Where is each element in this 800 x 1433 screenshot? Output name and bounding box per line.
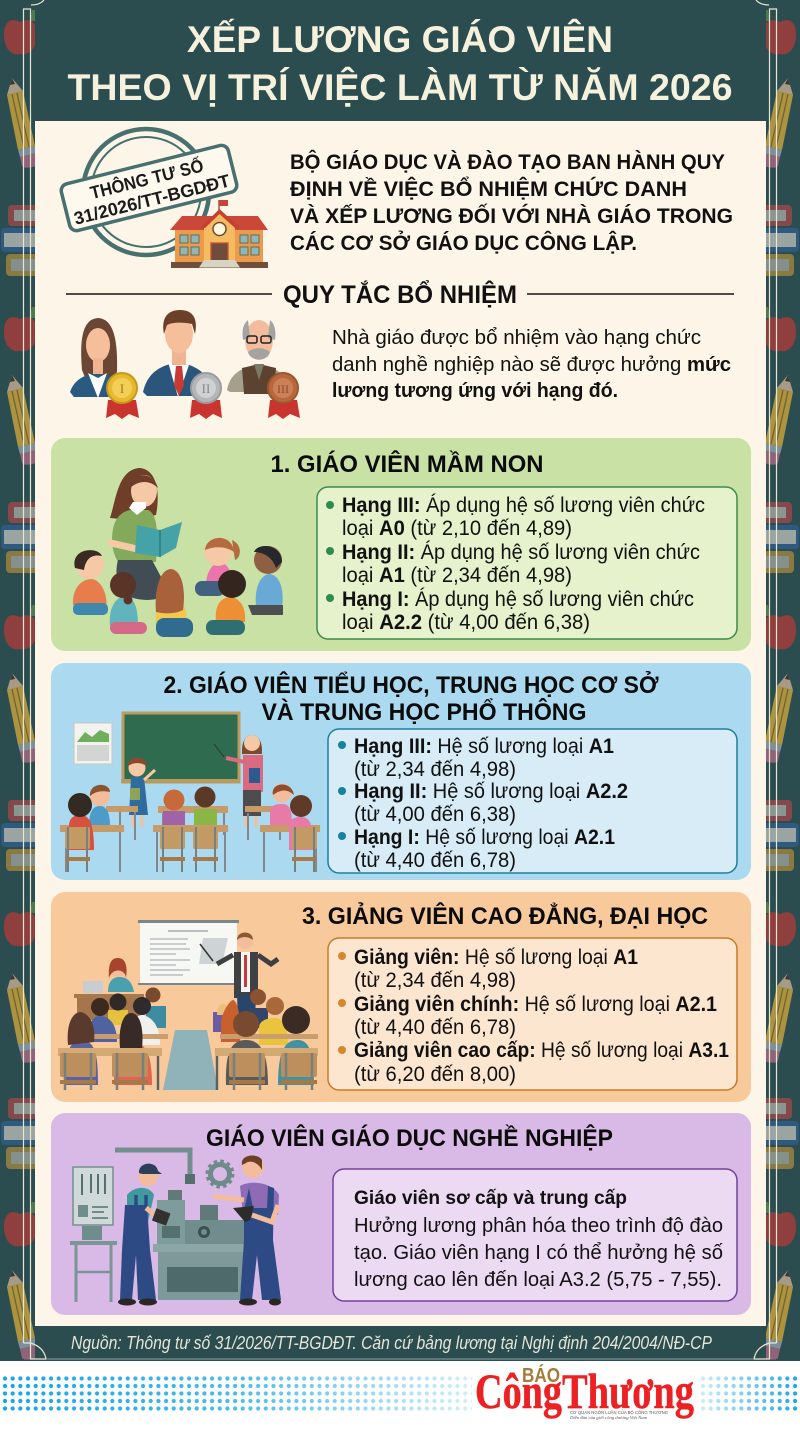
- source note: Nguồn: Thông tư số 31/2026/TT-BGDĐT. Căn cứ bảng lương tại Nghị định 204/2004/NĐ-CP: [71, 1333, 712, 1353]
- list box 1: loại A2.2 (từ 4,00 đến 6,38): [342, 611, 590, 634]
- intro text: BỘ GIÁO DỤC VÀ ĐÀO TẠO BAN HÀNH QUY: [290, 149, 725, 174]
- intro text: ĐỊNH VỀ VIỆC BỔ NHIỆM CHỨC DANH: [290, 176, 687, 201]
- heading 4: GIÁO VIÊN GIÁO DỤC NGHỀ NGHIỆP: [206, 1124, 613, 1152]
- list box 2: [328, 729, 737, 873]
- panel 4: vocational teachers: [51, 1113, 751, 1315]
- icon: school building: [170, 200, 268, 268]
- list box 3: [328, 938, 737, 1090]
- panel 3: college and university lecturers: [51, 892, 751, 1102]
- lathe: [157, 1200, 185, 1244]
- child: boy orange shirt, back view: [216, 597, 245, 622]
- list box 2: Hạng II: Hệ số lương loại A2.2: [354, 780, 628, 803]
- illustration: lecture hall: [58, 920, 318, 1090]
- rule description text: Nhà giáo được bổ nhiệm vào hạng chức: [332, 327, 701, 349]
- logo: Báo Công Thương: Diễn đàn của giới công thương Việt Nam: [569, 1415, 648, 1420]
- man with silver medal: [143, 310, 222, 419]
- info box 4: lương cao lên đến loại A3.2 (5,75 - 7,55).: [354, 1269, 722, 1291]
- list box 1: Hạng I: Áp dụng hệ số lương viên chức: [342, 588, 694, 611]
- panel 2: primary and secondary teachers: [51, 663, 751, 880]
- rule description text: [332, 327, 731, 402]
- worker right: [240, 1183, 279, 1215]
- list box 3: (từ 6,20 đến 8,00): [354, 1063, 516, 1086]
- right rows of students: [213, 1012, 231, 1032]
- woman with gold medal: I: [120, 381, 124, 396]
- logo: Báo Công Thương: BÁO: [522, 1364, 560, 1387]
- list box 3: (từ 4,40 đến 6,78): [354, 1016, 516, 1039]
- title: THEO VỊ TRÍ VIỆC LÀM TỪ NĂM 2026: [68, 66, 732, 108]
- left decorative pattern: apples, pencils, books: [1, 10, 42, 1360]
- teacher standing: [242, 735, 262, 754]
- logo: Báo Công Thương: Thương: [562, 1363, 694, 1419]
- logo: Báo Công Thương: [475, 1363, 694, 1420]
- title: XẾP LƯƠNG GIÁO VIÊN: [187, 18, 613, 60]
- bottom dotted band: [2, 1375, 800, 1413]
- cream content panel: [35, 121, 766, 1326]
- heading 3: 3. GIẢNG VIÊN CAO ĐẲNG, ĐẠI HỌC: [302, 901, 708, 930]
- rule description text: lương tương ứng với hạng đó.: [332, 380, 618, 402]
- heading 2: VÀ TRUNG HỌC PHỔ THÔNG: [262, 698, 586, 726]
- info box 4: [333, 1169, 737, 1301]
- list box 1: loại A1 (từ 2,34 đến 4,98): [342, 564, 572, 587]
- intro text: VÀ XẾP LƯƠNG ĐỐI VỚI NHÀ GIÁO TRONG: [290, 202, 733, 228]
- list box 1: [317, 487, 737, 639]
- list box 3: (từ 2,34 đến 4,98): [354, 969, 516, 992]
- heading 2: [164, 670, 659, 726]
- list box 1: loại A0 (từ 2,10 đến 4,89): [342, 517, 572, 540]
- heading 2: 2. GIÁO VIÊN TIỂU HỌC, TRUNG HỌC CƠ SỞ: [164, 670, 659, 699]
- older man with copper medal: III: [277, 382, 289, 396]
- list box 3: Giảng viên chính: Hệ số lương loại A2.1: [354, 993, 717, 1016]
- child: boy orange shirt: [73, 579, 106, 606]
- list box 1: Hạng II: Áp dụng hệ số lương viên chức: [342, 541, 700, 564]
- worker left: [127, 1188, 154, 1222]
- list box 2: (từ 2,34 đến 4,98): [354, 758, 516, 781]
- info box 4: Hưởng lương phân hóa theo trình độ đào: [354, 1215, 723, 1237]
- left desks and pupils: [120, 812, 135, 842]
- icon: three teachers with medals: [70, 310, 300, 419]
- info box 4: tạo. Giáo viên hạng I có thể hưởng hệ số: [354, 1242, 723, 1264]
- illustration: workshop with lathe: [70, 1150, 281, 1306]
- illustration: classroom: [60, 713, 320, 872]
- intro text: CÁC CƠ SỞ GIÁO DỤC CÔNG LẬP.: [290, 230, 637, 255]
- child: girl teal shirt: [110, 596, 138, 626]
- older man with copper medal: [227, 320, 300, 419]
- title: [68, 18, 732, 108]
- info box 4: Giáo viên sơ cấp và trung cấp: [354, 1188, 627, 1209]
- right desks and pupils: [248, 813, 280, 840]
- panel 1: preschool teachers: [51, 438, 751, 651]
- child: girl pink shirt: [206, 562, 232, 592]
- man with silver medal: II: [202, 381, 210, 396]
- heading 1: 1. GIÁO VIÊN MẦM NON: [270, 450, 544, 478]
- child: boy blue shirt: [256, 574, 283, 606]
- center desks and pupils: [163, 813, 224, 835]
- list box 2: Hạng I: Hệ số lương loại A2.1: [354, 826, 615, 849]
- stamp: Thông tư số 31/2026/TT-BGDĐT: [60, 129, 238, 255]
- gear: [210, 1164, 230, 1184]
- standing girl: [128, 760, 146, 776]
- list box 2: (từ 4,40 đến 6,78): [354, 849, 516, 872]
- stamp: Thông tư số 31/2026/TT-BGDĐT: THÔNG TƯ SỐ: [88, 155, 206, 203]
- list box 3: Giảng viên cao cấp: Hệ số lương loại A3.1: [354, 1039, 729, 1062]
- list box 2: Hạng III: Hệ số lương loại A1: [354, 735, 614, 758]
- stamp: Thông tư số 31/2026/TT-BGDĐT: 31/2026/TT-BGDĐT: [72, 171, 232, 229]
- logo: Báo Công Thương: Công: [475, 1363, 562, 1419]
- intro text: [290, 149, 733, 255]
- illustration: teacher reading to children: [73, 468, 283, 637]
- rule description text: danh nghề nghiệp nào sẽ được hưởng mức: [332, 354, 731, 376]
- list box 2: (từ 4,00 đến 6,38): [354, 803, 516, 826]
- list box 1: Hạng III: Áp dụng hệ số lương viên chức: [342, 494, 705, 517]
- woman with gold medal: [70, 318, 139, 419]
- heading: Quy tắc bổ nhiệm: QUY TẮC BỔ NHIỆM: [283, 279, 517, 309]
- right decorative pattern: apples, pencils, books: [758, 10, 799, 1360]
- list box 3: Giảng viên: Hệ số lương loại A1: [354, 946, 638, 969]
- child: girl long hair: [156, 600, 186, 622]
- logo: Báo Công Thương: CƠ QUAN NGÔN LUẬN CỦA BỘ CÔNG THƯƠNG: [570, 1409, 668, 1415]
- left rows of students: [146, 1006, 166, 1028]
